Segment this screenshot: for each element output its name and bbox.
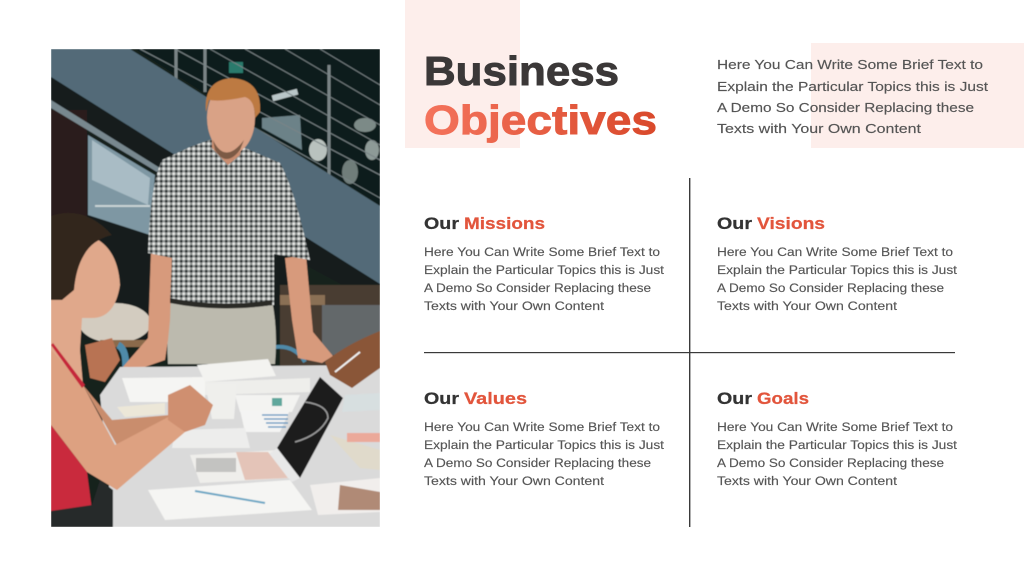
title [424,48,657,143]
heading: our visions: Our [717,214,752,233]
text block: values: Texts with Your Own Content [424,474,605,488]
text block: goals: Explain the Particular Topics this is Just [717,438,958,452]
text block: visions [717,245,958,313]
text block: missions: Explain the Particular Topics this is Just [424,263,665,277]
text block: goals: Here You Can Write Some Brief Text to [717,420,953,434]
heading: our goals: Our [717,389,752,408]
coffee cup [208,394,236,419]
upper right plants and railing [135,49,380,210]
text block: missions: Texts with Your Own Content [424,299,605,313]
panel: our visions [717,214,958,313]
heading: our goals: Goals [757,389,809,408]
woman: hair [51,213,112,300]
text block: missions: A Demo So Consider Replacing these [424,281,651,295]
panel: our goals [717,389,958,488]
intro text block: Texts with Your Own Content [717,121,921,136]
horizontal divider [424,352,955,353]
pink accent block behind title [405,0,520,148]
text block: goals [717,420,958,488]
white planter and chairs [79,303,305,375]
woman: clasped hands [168,385,213,432]
woman: far hand [85,338,120,382]
title: Business [424,48,619,94]
woman: red top [51,425,92,513]
woman: neck and face [51,238,120,385]
staircase underside [51,49,380,284]
laptop [236,377,343,482]
text block: values: A Demo So Consider Replacing these [424,456,651,470]
left window and dark wall [51,100,160,236]
intro text block: A Demo So Consider Replacing these [717,100,974,115]
text block: visions: Here You Can Write Some Brief Text to [717,245,953,259]
woman: far arm [84,386,169,445]
woman: red strap [51,343,85,388]
text block: goals: Texts with Your Own Content [717,474,898,488]
man: belt [170,298,272,309]
photo background [51,49,380,527]
man: arms [122,250,333,374]
man: trousers [167,300,276,364]
heading: our values: Our [424,389,459,408]
pink accent block behind intro text [811,43,1024,148]
table [100,365,380,527]
text block: visions: A Demo So Consider Replacing these [717,281,944,295]
lower right room [280,285,380,370]
man: neck and head [206,78,260,165]
text block: missions: Here You Can Write Some Brief Text to [424,245,660,259]
woman: dark trousers [51,480,113,527]
woman: near arm and shoulder [51,348,185,490]
intro text block [717,57,988,136]
title: Objectives [424,97,657,143]
text block: missions [424,245,665,313]
text block: goals: A Demo So Consider Replacing these [717,456,944,470]
photo: team meeting around a table [51,49,380,527]
text block: visions: Texts with Your Own Content [717,299,898,313]
intro text block: Here You Can Write Some Brief Text to [717,57,983,72]
heading: our missions: Our [424,214,459,233]
panel: our missions [424,214,665,313]
text block: values: Explain the Particular Topics this is Just [424,438,665,452]
heading: our visions: Visions [757,214,825,233]
vertical divider [689,178,690,527]
text block: values [424,420,665,488]
panel: our values [424,389,665,488]
text block: visions: Explain the Particular Topics this is Just [717,263,958,277]
heading: our missions: Missions [464,214,545,233]
man: gingham shirt [148,138,310,308]
right side hands and pen [325,331,380,388]
heading: our values: Values [464,389,527,408]
text block: values: Here You Can Write Some Brief Text to [424,420,660,434]
papers on table [117,359,380,520]
intro text block: Explain the Particular Topics this is Just [717,79,988,94]
